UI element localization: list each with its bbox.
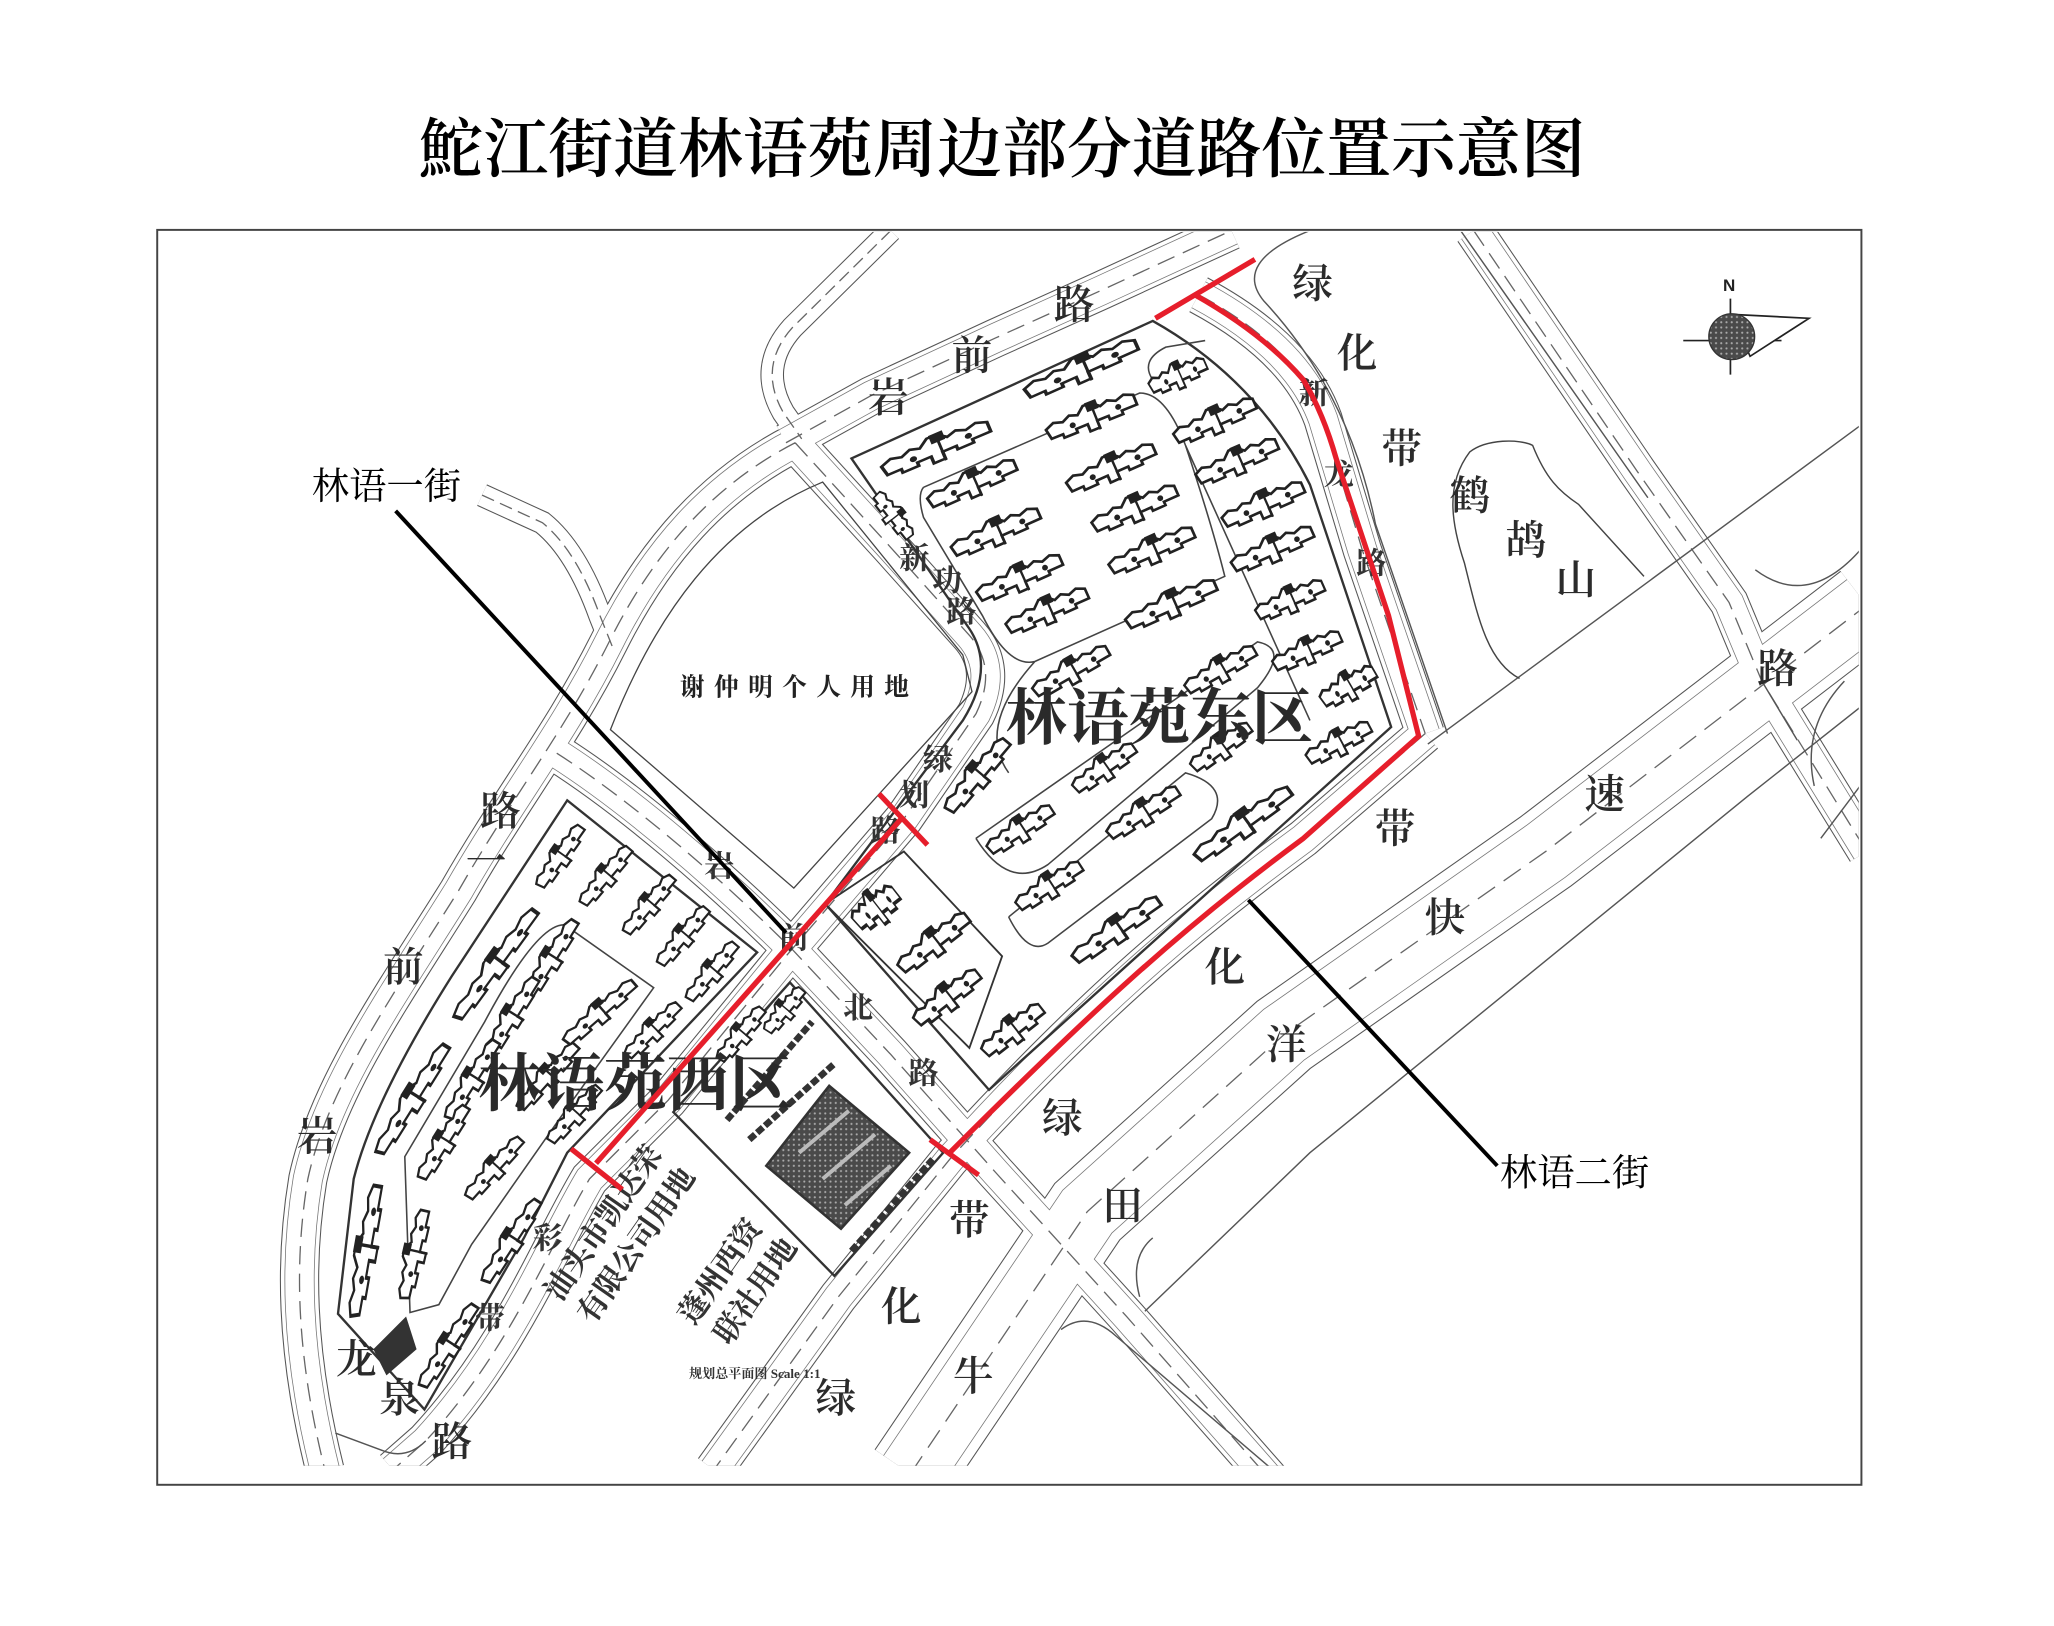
west district label: 林语苑西区 [478, 1034, 792, 1124]
map labels: 路 [432, 1419, 472, 1464]
map labels: 功 [932, 564, 962, 598]
parcel label: Shantou company land: 汕头市凯达荣 [538, 1139, 669, 1307]
map labels: 新 [899, 542, 929, 576]
map labels: 鸪 [1506, 518, 1546, 563]
map labels: 龙 [336, 1337, 377, 1382]
callout line: 林语一街 [396, 511, 786, 933]
map labels: 岩 [297, 1114, 337, 1159]
map labels: 牛 [953, 1354, 994, 1399]
map labels: 路 [870, 814, 901, 848]
map labels: 速 [1584, 772, 1626, 817]
map labels: 路 [946, 595, 977, 629]
map frame [157, 230, 1861, 1485]
林语二街 [930, 259, 1419, 1175]
map labels: 北 [843, 991, 873, 1025]
map labels: 前 [952, 333, 992, 378]
title: 鮀江街道林语苑周边部分道路位置示意图 [419, 97, 1586, 191]
map labels: 带 [1381, 426, 1422, 471]
map labels: 田 [1102, 1184, 1143, 1229]
map labels: 带 [1375, 806, 1415, 851]
callout line: 林语二街 [1248, 900, 1497, 1166]
west block inner road [405, 925, 654, 1313]
map labels: 岩 [704, 849, 734, 883]
map labels: 一 [466, 839, 506, 884]
red road lines [571, 259, 1419, 1189]
map labels: 化 [1204, 945, 1245, 990]
map labels: 绿 [1292, 261, 1333, 306]
map labels: 前 [383, 945, 424, 990]
plan caption: 规划总平面图 Scale 1:1 [689, 1365, 821, 1381]
map labels: 绿 [1042, 1096, 1083, 1141]
buildings: west block [342, 820, 812, 1393]
map labels: 路 [1054, 282, 1094, 327]
map: road network [300, 231, 1867, 1480]
south block boundary [673, 982, 943, 1276]
east block boundary [825, 321, 1391, 1090]
parcel label: Pengzhou land: 联社用地 [707, 1232, 804, 1350]
map labels: 带 [474, 1301, 505, 1335]
map labels: 绿 [923, 743, 953, 777]
map labels: 岩 [868, 375, 908, 420]
map labels: 泉 [379, 1376, 420, 1421]
map labels: 路 [1356, 547, 1387, 581]
south block small plot [825, 851, 1002, 1048]
east district label: 林语苑东区 [1005, 668, 1313, 757]
callout label: 林语一街: 林语一街 [312, 466, 461, 508]
icon: north arrow [1683, 276, 1809, 375]
map labels: 前 [779, 921, 809, 955]
parcel label: Pengzhou land: 蓬州西资 [672, 1209, 771, 1331]
map labels: 路 [480, 789, 521, 834]
map labels: 龙 [1324, 458, 1354, 492]
icon: north arrow: N [1723, 276, 1735, 295]
east block inner roads [920, 341, 1310, 946]
west block boundary [338, 800, 757, 1409]
parcel outline: private land 谢仲明个人用地 [610, 482, 972, 888]
private land label: 谢仲明个人用地 [680, 674, 918, 702]
林语一街 [571, 794, 927, 1189]
map labels: 鹤 [1449, 474, 1490, 519]
parcel label: Pengzhou land [672, 1209, 804, 1350]
map labels: 化 [1337, 331, 1377, 376]
callout label: 林语二街: 林语二街 [1500, 1152, 1649, 1194]
dark stipple parcel [727, 1022, 933, 1251]
map labels [297, 261, 1798, 1464]
map labels: 洋 [1266, 1022, 1307, 1067]
map labels: 化 [881, 1284, 922, 1329]
map labels: 彩 [533, 1221, 563, 1255]
map labels: 划 [899, 779, 929, 813]
buildings: east block [843, 331, 1383, 1065]
hill outline: 鹤鸪山 [1453, 441, 1644, 679]
map labels: 路 [1757, 646, 1798, 691]
block outlines [338, 321, 1391, 1409]
map labels: 山 [1556, 557, 1596, 602]
parcel label: Shantou company land: 有限公司用地 [571, 1161, 702, 1329]
map labels: 路 [908, 1056, 939, 1090]
map labels: 带 [949, 1198, 990, 1243]
map labels: 新 [1299, 376, 1329, 410]
map labels: 绿 [815, 1376, 856, 1421]
map labels: 快 [1425, 895, 1465, 940]
